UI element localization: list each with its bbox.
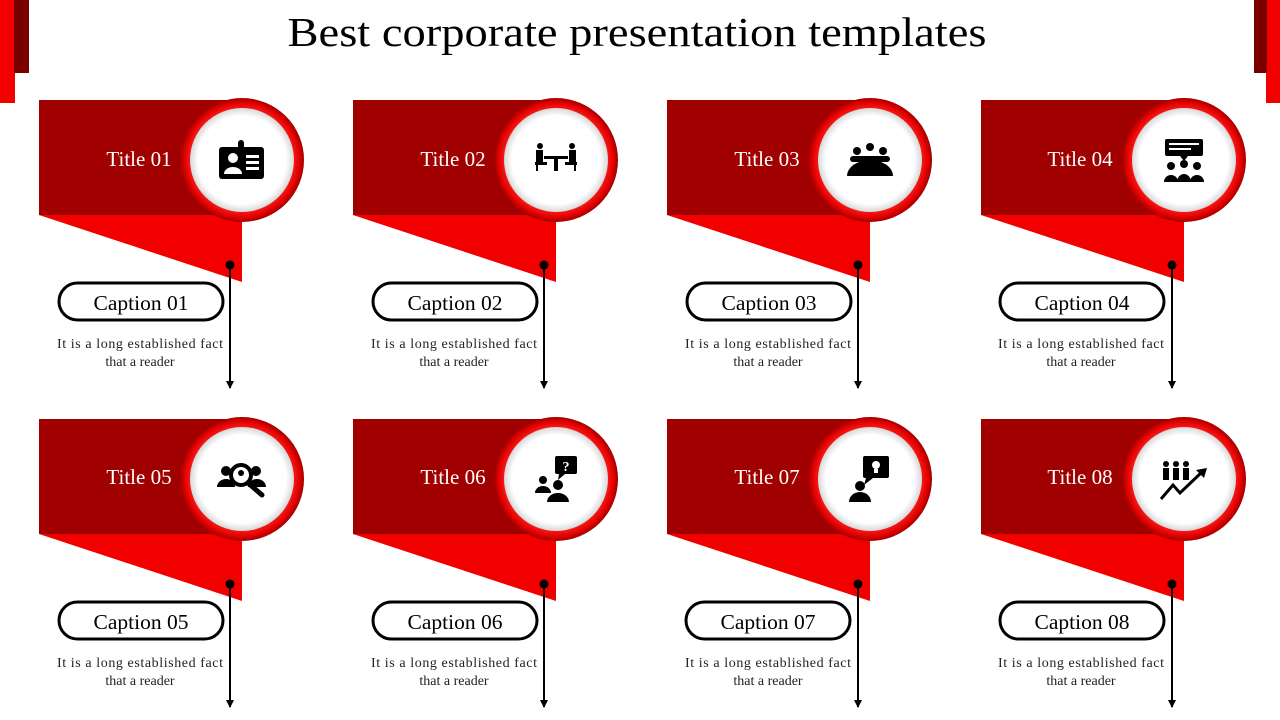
card 03: that a reader [733,355,803,370]
card 06: It is a long established fact [371,656,537,671]
icon: id badge [219,140,264,179]
card 06: Caption 06 [408,610,503,634]
card 02: Title 02 [420,147,486,171]
card 02: Caption 02 [408,291,502,315]
card 01 [39,98,304,388]
card 01: It is a long established fact [57,337,223,352]
card 04 [981,98,1246,388]
card 07: It is a long established fact [685,656,851,671]
corner decoration right [1254,0,1280,103]
card 03 [667,98,932,388]
card 07: Title 07 [734,465,800,489]
card 01: that a reader [105,355,175,370]
icon: presentation group [1164,139,1204,182]
card 04: Caption 04 [1035,291,1130,315]
card 07 [667,417,932,707]
card 05 [39,417,304,707]
card 03: Caption 03 [722,291,816,315]
icon: idea person [849,456,889,502]
icon: growth team [1161,461,1207,499]
card 03: Title 03 [734,147,800,171]
title: Best corporate presentation templates [288,9,986,55]
card 06: Title 06 [420,465,486,489]
card 02 [353,98,618,388]
icon: question people [535,456,577,502]
card 08: Title 08 [1047,465,1113,489]
card 06: that a reader [419,674,489,689]
card 08: that a reader [1046,674,1116,689]
card 05: It is a long established fact [57,656,223,671]
corner decoration left [0,0,29,103]
card 01: Caption 01 [94,291,188,315]
card 06 [353,417,618,707]
icon: search people [217,465,266,495]
card 08: It is a long established fact [998,656,1164,671]
card 04: It is a long established fact [998,337,1164,352]
card 05: that a reader [105,674,175,689]
card 08 [981,417,1246,707]
card 03: It is a long established fact [685,337,851,352]
card 01: Title 01 [106,147,172,171]
card 08: Caption 08 [1035,610,1129,634]
card 05: Title 05 [106,465,172,489]
icon: group [847,143,893,176]
icon: meeting table [535,143,577,171]
card 07: that a reader [733,674,803,689]
icon: question people: ? [562,460,570,475]
card 04: Title 04 [1047,147,1113,171]
card 04: that a reader [1046,355,1116,370]
card 02: that a reader [419,355,489,370]
card 05: Caption 05 [94,610,188,634]
card 07: Caption 07 [721,610,816,634]
card 02: It is a long established fact [371,337,537,352]
